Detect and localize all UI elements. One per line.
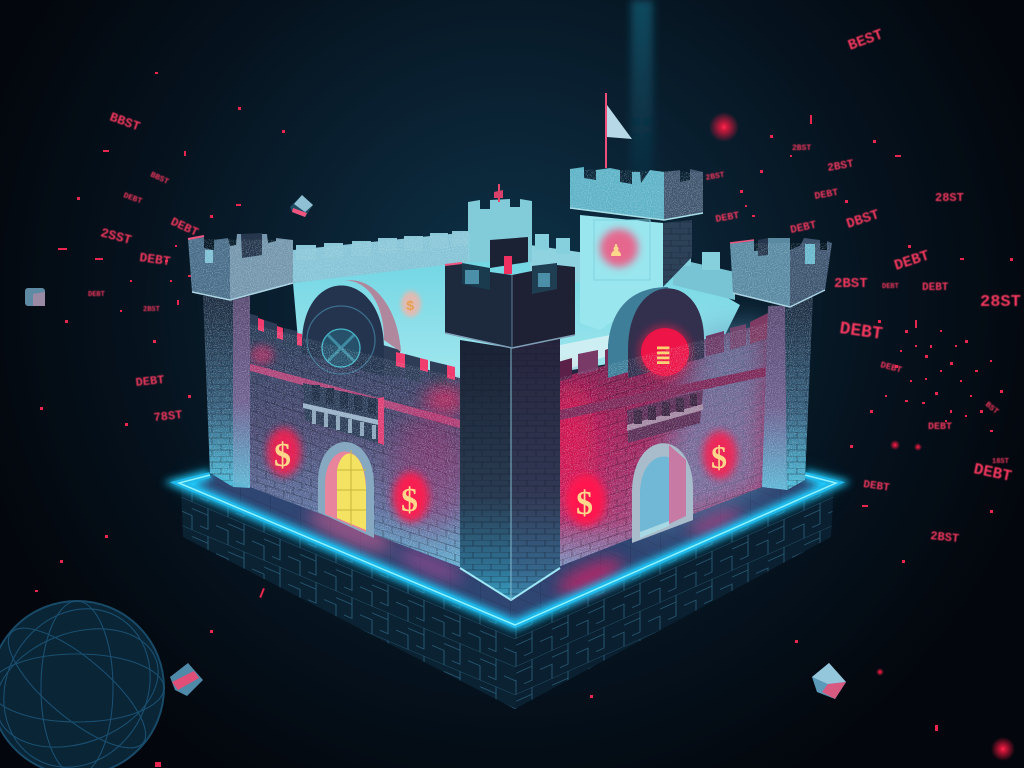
- red glow dots: [709, 112, 1015, 761]
- back-right wall: [530, 234, 735, 300]
- debt text fragments: BBST: [149, 171, 170, 187]
- right tower head: [730, 238, 790, 307]
- merlons left: [243, 312, 455, 386]
- neon edge: [179, 475, 836, 625]
- debt text fragments: DEBT: [879, 360, 903, 376]
- right tower body: [762, 306, 787, 490]
- dollar sign left b: $: [401, 482, 418, 519]
- cube: lower left: [170, 663, 203, 696]
- debt text fragments: DEBT: [814, 188, 839, 203]
- dollar sign left b: [393, 472, 429, 522]
- left wall details: [267, 428, 429, 538]
- left wall: [243, 280, 470, 567]
- glow: bottom right: [991, 737, 1015, 761]
- debt text fragments: 28ST: [935, 191, 964, 205]
- debt text fragments: DEBT: [882, 283, 899, 291]
- debt text fragments: 2BST: [930, 529, 960, 546]
- keep body: [580, 215, 663, 330]
- wireframe globe: [0, 582, 179, 768]
- small back tower: [468, 184, 532, 262]
- dollar sign left a: $: [274, 437, 291, 474]
- debt text fragments: DEBT: [88, 291, 105, 299]
- debt text fragments: DEBT: [862, 479, 891, 495]
- dollar sign right a: $: [576, 485, 593, 522]
- base plinth: [179, 470, 836, 709]
- debt text fragments: DEBT: [789, 220, 818, 237]
- flag: [606, 93, 632, 168]
- tower left face: [460, 340, 511, 600]
- debt text fragments: 2BST: [792, 144, 811, 153]
- glow: top right: [709, 112, 739, 142]
- tower right face: [511, 336, 560, 600]
- left corner tower: [188, 233, 293, 488]
- arch medallion: ≣: [656, 344, 670, 371]
- debt text fragments: DEBT: [135, 373, 165, 390]
- base left side: [181, 485, 515, 709]
- debt text fragments: BST: [983, 400, 1000, 417]
- debt text fragments: DEBT: [972, 460, 1014, 486]
- keep emblem: [600, 229, 638, 267]
- tower head: [445, 263, 512, 348]
- moulding: [247, 363, 460, 428]
- right corner tower: [730, 238, 832, 490]
- left tower head: [188, 236, 230, 300]
- right wall: [548, 287, 770, 567]
- merlons right: [558, 313, 768, 382]
- glowing gate: [318, 442, 374, 538]
- base right side: [515, 485, 834, 709]
- debt text fragments: 18ST: [992, 458, 1009, 466]
- debt text fragments: DEBT: [922, 282, 949, 294]
- courtyard emblem: $: [406, 299, 414, 315]
- keep emblem: ♟: [610, 240, 622, 263]
- dollar sign right a: [566, 474, 606, 526]
- cube: upper: [290, 195, 313, 217]
- courtyard emblem: [401, 291, 421, 317]
- moulding: [560, 367, 767, 420]
- right ornament band: [627, 390, 703, 443]
- debt text fragments: 28ST: [980, 293, 1021, 312]
- blue fade on wall: [640, 322, 770, 535]
- rear keep tower: [570, 93, 703, 330]
- arch medallion: [608, 287, 704, 379]
- front center tower: [445, 237, 575, 600]
- debt text fragments: 2BST: [143, 306, 160, 314]
- dollar sign left a: [267, 428, 301, 476]
- light beam: [631, 0, 653, 175]
- castle: [179, 93, 836, 709]
- open gate: [632, 443, 693, 543]
- base top deck: [179, 475, 836, 625]
- keep head: [570, 167, 664, 220]
- back walls: [293, 93, 740, 385]
- debt text fragments: DEBT: [928, 422, 952, 433]
- debt text fragments: 2BST: [834, 276, 868, 292]
- dollar sign right b: [703, 431, 737, 479]
- cube: left: [25, 288, 45, 306]
- debt text fragments: BEST: [846, 26, 886, 55]
- left ornament band: [303, 383, 384, 445]
- debt text fragments: BBST: [108, 110, 142, 134]
- debt text fragments: 2SST: [99, 225, 133, 248]
- courtyard glow: [293, 258, 740, 385]
- base halo: [179, 470, 836, 625]
- debt text fragments: DEBT: [138, 250, 172, 269]
- arch medallion: [302, 280, 401, 376]
- debt text fragments: DEBT: [838, 319, 884, 345]
- wall grain texture: [188, 169, 832, 567]
- courtyard floor: [560, 335, 625, 372]
- debt text fragments: DEBT: [715, 211, 740, 226]
- debt text fragments: DEBT: [168, 215, 200, 240]
- cube: lower right: [812, 663, 846, 699]
- debt text fragments: [88, 26, 1021, 546]
- debt text fragments: DEBT: [892, 247, 932, 275]
- dollar sign right b: $: [711, 439, 727, 475]
- debt text fragments: DBST: [845, 207, 882, 233]
- debt text fragments: 78ST: [153, 408, 183, 425]
- debt text fragments: 2BST: [827, 158, 855, 175]
- debt text fragments: 2BST: [705, 171, 726, 183]
- debt text fragments: DEBT: [122, 191, 143, 206]
- floating cubes: [25, 195, 846, 699]
- back-left wall: [293, 231, 470, 283]
- left tower body: [203, 296, 233, 487]
- right wall details: [566, 431, 737, 543]
